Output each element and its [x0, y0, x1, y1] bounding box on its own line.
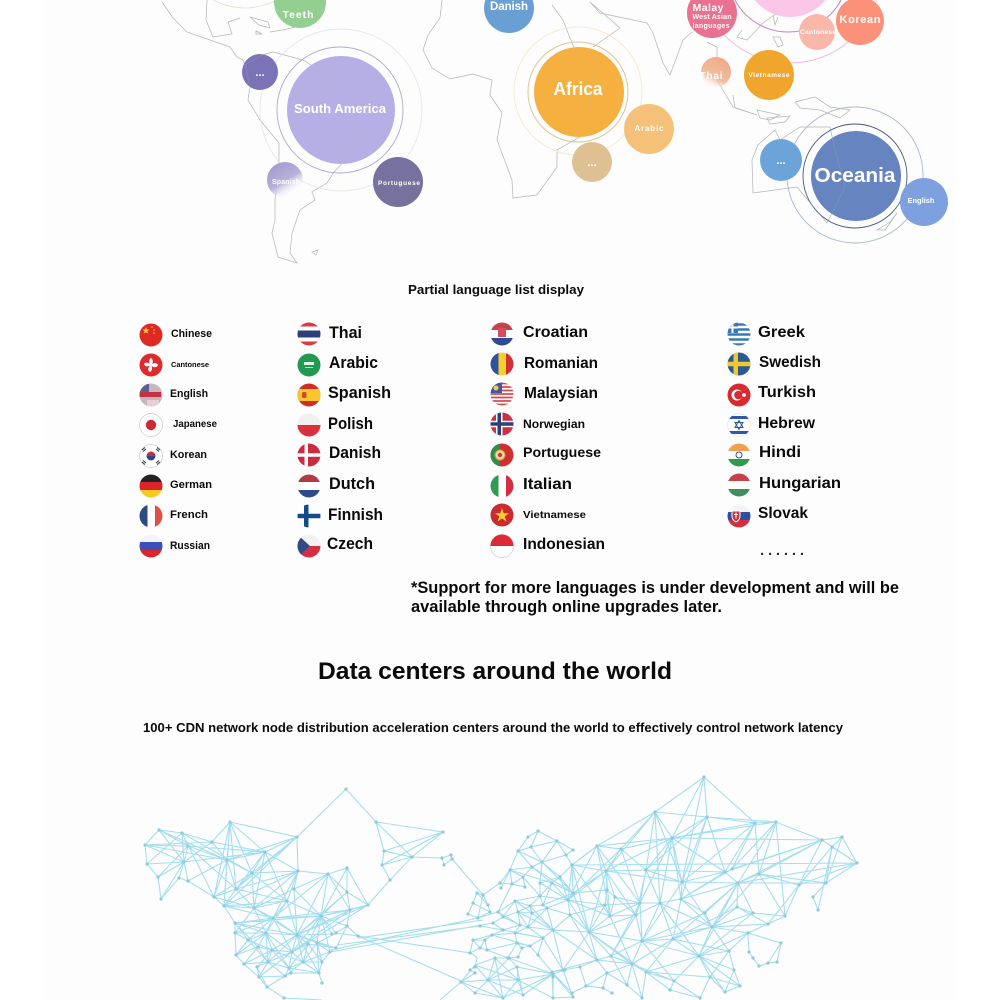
africa label: Africa [554, 79, 603, 99]
label: Finnish: Finnish [328, 506, 383, 524]
oceania bubble [811, 131, 901, 221]
label: Arabic: Arabic [329, 354, 378, 372]
label: Czech: Czech [327, 535, 373, 553]
flag: Portugal [490, 443, 514, 467]
panel: oceania [760, 107, 948, 243]
label: Dutch: Dutch [329, 475, 375, 493]
flag: Hong Kong [139, 353, 163, 377]
title: data centers: Data centers around the world [318, 658, 672, 685]
cantonese bubble [799, 14, 835, 50]
ellipsis bubble [572, 142, 612, 182]
note: more languages [411, 579, 899, 616]
flag: Czechia [297, 534, 321, 558]
inner ring [803, 124, 907, 228]
flag: Malaysia [490, 382, 514, 406]
panel: south america [242, 29, 423, 207]
note line one: *Support for more languages is under development and will be [411, 579, 899, 597]
portuguese label: Portuguese [378, 180, 420, 187]
world language map [162, 0, 948, 263]
flag: Greece [727, 322, 751, 346]
label: Hindi: Hindi [759, 444, 801, 461]
ellipsis bubble [760, 139, 802, 181]
label: German: German [170, 479, 212, 491]
coastlines showing through bubbles [162, 0, 897, 263]
network nodes [145, 777, 857, 998]
panel: asia [687, 0, 884, 100]
flag: Denmark [297, 443, 321, 467]
flag: Slovakia [727, 504, 751, 528]
flag: Poland [297, 413, 321, 437]
flag: Israel [728, 414, 750, 436]
ellipsis label: ... [255, 67, 265, 79]
flag: Finland [297, 504, 321, 528]
subtitle: CDN network: 100+ CDN network node distribution acceleration centers around the world to effectively control network latency [143, 721, 843, 735]
label: Malaysian: Malaysian [524, 385, 598, 402]
south america label: South America [294, 101, 387, 116]
ellipsis label: ... [776, 155, 786, 167]
flag: Romania [490, 352, 514, 376]
label: Russian: Russian [170, 540, 210, 552]
label: Thai: Thai [329, 324, 362, 342]
danish bubble [484, 0, 534, 33]
flag: Italy [490, 475, 514, 497]
ring: north america [213, 0, 277, 8]
label: Polish: Polish [328, 415, 373, 433]
label: Spanish: Spanish [328, 384, 391, 402]
flag: Sweden [727, 352, 751, 376]
ellipsis label: ... [587, 157, 597, 169]
heading: partial language list: Partial language list display [408, 283, 584, 297]
label: Hungarian: Hungarian [759, 475, 841, 492]
label: Turkish: Turkish [758, 384, 816, 401]
korean bubble [836, 0, 884, 45]
label: Korean: Korean [170, 449, 207, 461]
thai label: Thai [700, 71, 723, 82]
panel: language list [139, 322, 841, 559]
portuguese bubble [373, 157, 423, 207]
flag: Hungary [728, 474, 750, 496]
label: Italian: Italian [523, 476, 572, 493]
flag: English [139, 383, 163, 407]
flag: Indonesia [490, 534, 514, 558]
flag: France [140, 505, 162, 527]
label: Croatian: Croatian [523, 324, 588, 341]
teeth label: Teeth [282, 9, 314, 21]
outer ring [260, 29, 422, 191]
panel: africa [514, 27, 674, 182]
label: English: English [170, 388, 208, 400]
arabic bubble [624, 104, 674, 154]
inner ring [277, 47, 403, 173]
teeth bubble [274, 0, 326, 28]
flag: Turkey [727, 383, 751, 407]
label: Danish: Danish [329, 444, 381, 462]
flag: Japan [140, 414, 162, 436]
label: Hebrew: Hebrew [758, 415, 816, 432]
more languages ellipsis: ...... [760, 542, 804, 559]
flag: Thailand [297, 322, 321, 346]
english label: English [908, 196, 935, 205]
vietnamese bubble [744, 50, 794, 100]
oceania label: Oceania [814, 164, 896, 187]
label: Romanian: Romanian [524, 355, 598, 372]
south america bubble [287, 56, 395, 164]
languages label: languages [692, 23, 730, 30]
outer ring [699, 0, 881, 63]
flag: Korea [140, 444, 162, 468]
label: Indonesian: Indonesian [523, 536, 605, 553]
label: Norwegian: Norwegian [523, 419, 585, 431]
label: Portuguese: Portuguese [523, 445, 602, 460]
ellipsis bubble [242, 54, 278, 90]
flag: Germany [139, 474, 163, 498]
korean label: Korean [840, 14, 881, 26]
coastline outlines [162, 0, 897, 263]
label: Cantonese: Cantonese [171, 360, 209, 369]
label: French: French [170, 509, 208, 521]
flag: Spain [297, 383, 321, 407]
malay label: Malay [692, 2, 724, 14]
english bubble [900, 178, 948, 226]
flag: Norway [490, 412, 514, 436]
africa bubble [534, 47, 624, 137]
vietnamese label: Vietnamese [748, 72, 790, 79]
flag: Saudi Arabia [297, 353, 321, 377]
label: Vietnamese: Vietnamese [523, 509, 586, 521]
label: Greek: Greek [758, 324, 805, 341]
malay bubble [687, 0, 737, 38]
flag: Netherlands [298, 474, 320, 498]
flag: India [728, 444, 750, 466]
flag: Croatia [491, 322, 513, 346]
label: Chinese: Chinese [171, 328, 212, 340]
network links [145, 777, 857, 1000]
cantonese label: Cantonese [800, 29, 836, 36]
outer ring [787, 107, 923, 243]
inner ring [728, 0, 848, 32]
thai bubble [701, 57, 731, 87]
spanish bubble [267, 162, 303, 198]
arabic label: Arabic [634, 124, 664, 133]
network map [145, 777, 857, 1000]
outer ring [514, 27, 642, 155]
label: Swedish: Swedish [759, 354, 821, 371]
danish label: Danish [490, 1, 528, 13]
west asian label: West Asian [692, 14, 732, 21]
flag: China [139, 323, 163, 347]
flag: Russia [139, 534, 163, 558]
label: Slovak: Slovak [758, 505, 808, 522]
label: Japanese: Japanese [173, 419, 217, 430]
spanish label: Spanish [272, 179, 300, 186]
asia bubble [745, 0, 835, 17]
note line two: available through online upgrades later. [411, 598, 722, 616]
flag: Vietnam [490, 503, 514, 527]
inner ring [528, 42, 628, 142]
